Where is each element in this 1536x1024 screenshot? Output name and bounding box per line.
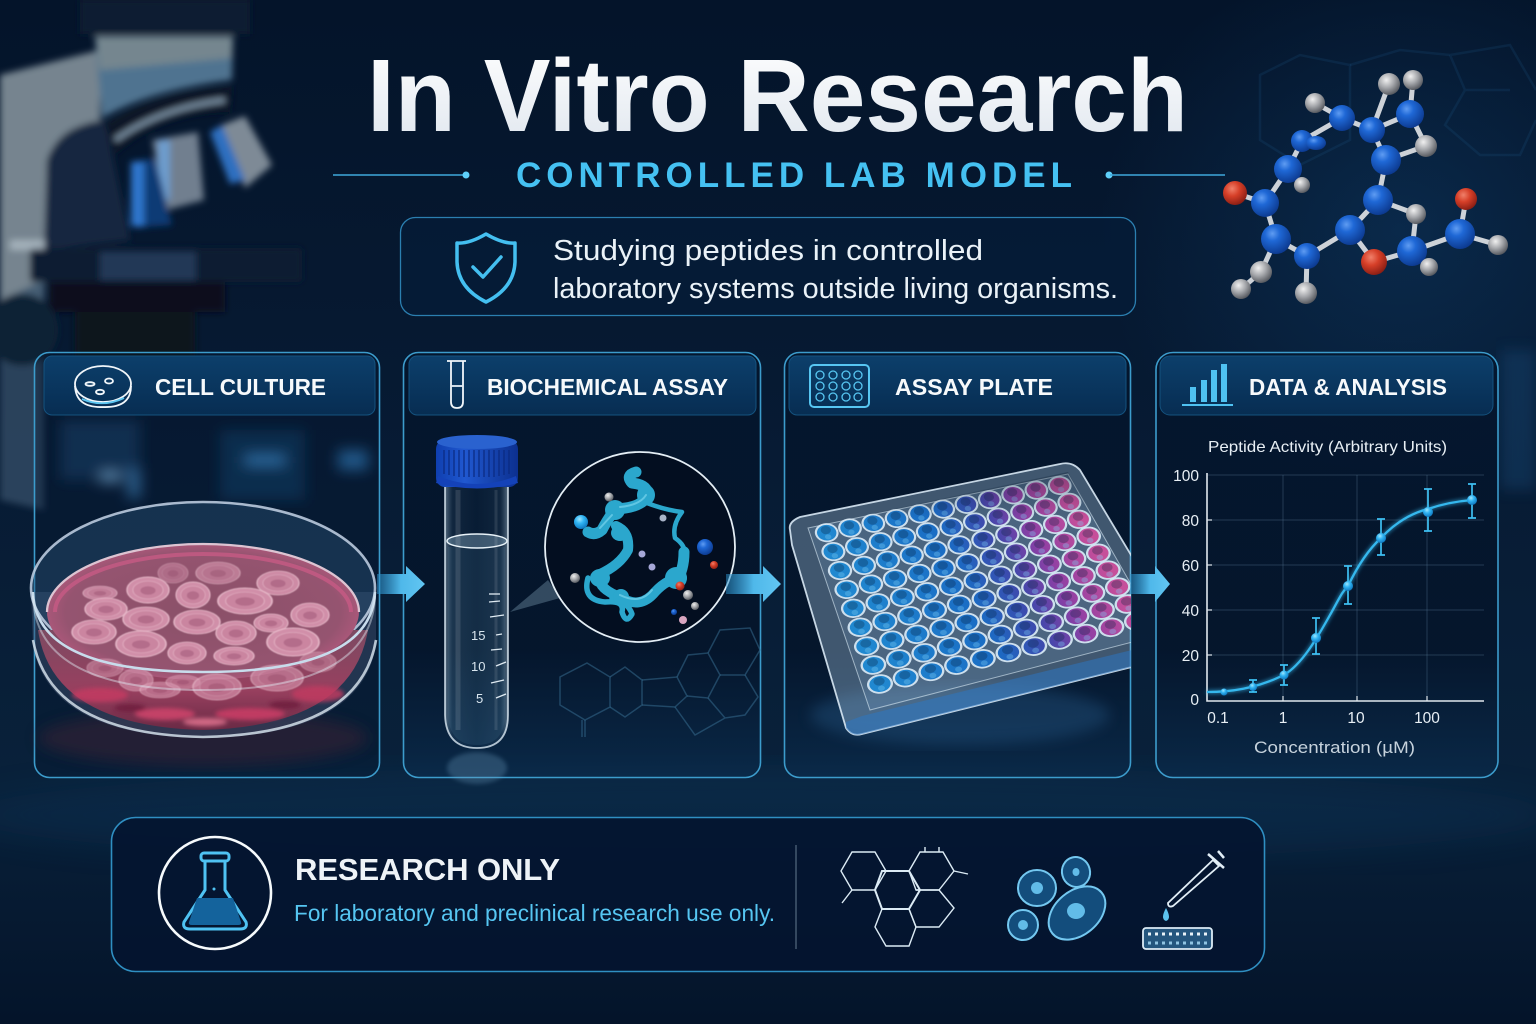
x axis labels: 0.1 bbox=[1207, 710, 1229, 727]
x axis labels: 100 bbox=[1414, 710, 1440, 727]
well plate bbox=[790, 463, 1140, 745]
error bars bbox=[1249, 484, 1476, 692]
peptide magnifier bbox=[545, 452, 735, 642]
y axis labels: 80 bbox=[1182, 513, 1199, 530]
icon: shield bbox=[457, 234, 515, 302]
faint hexagon structure bbox=[560, 628, 760, 737]
x axis title: Concentration (µM) bbox=[1254, 738, 1415, 757]
panel: cell culture bbox=[31, 352, 380, 778]
chart title: Peptide Activity (Arbitrary Units) bbox=[1208, 439, 1447, 456]
x axis labels: 1 bbox=[1279, 710, 1287, 727]
test tube: 15 bbox=[471, 628, 485, 643]
icon: cells bbox=[1008, 854, 1116, 950]
x axis labels: 10 bbox=[1347, 710, 1365, 727]
callout wedge bbox=[510, 580, 560, 612]
heading: DATA & ANALYSIS bbox=[1249, 374, 1447, 400]
petri dish bbox=[31, 502, 376, 766]
y axis labels: 40 bbox=[1182, 603, 1199, 620]
line chart bbox=[1173, 468, 1484, 757]
heading: ASSAY PLATE bbox=[895, 374, 1053, 400]
arrow: culture to assay bbox=[377, 566, 425, 602]
icon: petri dish bbox=[75, 366, 131, 407]
y axis labels: 20 bbox=[1182, 648, 1199, 665]
note: For laboratory and preclinical research use only. bbox=[294, 900, 775, 926]
background hexagon network bbox=[1260, 45, 1536, 165]
icon: well plate bbox=[810, 365, 869, 407]
heading: BIOCHEMICAL ASSAY bbox=[487, 374, 728, 400]
test tube: 5 bbox=[476, 691, 483, 706]
icon: molecular hexagons bbox=[841, 847, 968, 946]
info text: laboratory systems outside living organisms. bbox=[553, 273, 1118, 305]
data points bbox=[1220, 495, 1477, 696]
blurred microscope bbox=[0, 0, 302, 510]
icon: bar chart bbox=[1182, 364, 1233, 406]
arrow: assay to plate bbox=[726, 566, 781, 602]
panel: assay plate bbox=[784, 352, 1140, 778]
panel: data and analysis bbox=[1156, 352, 1498, 778]
y axis labels: 0 bbox=[1190, 692, 1199, 709]
test tube: 10 bbox=[471, 659, 485, 674]
test tube bbox=[436, 435, 518, 784]
arrow: plate to data bbox=[1130, 566, 1170, 602]
y axis labels: 60 bbox=[1182, 558, 1199, 575]
blurred lab bottles bbox=[60, 420, 368, 500]
molecule bbox=[1223, 70, 1508, 304]
icon: flask badge bbox=[159, 837, 271, 949]
y axis labels: 100 bbox=[1173, 468, 1199, 485]
sigmoid curve bbox=[1207, 500, 1472, 692]
subtitle row bbox=[333, 156, 1225, 195]
subtitle: CONTROLLED LAB MODEL bbox=[516, 156, 1072, 195]
title: In Vitro Research bbox=[367, 38, 1188, 153]
panel: research only bbox=[112, 818, 1264, 972]
info box bbox=[400, 218, 1136, 316]
icon: test tube bbox=[447, 361, 466, 408]
heading: CELL CULTURE bbox=[155, 374, 326, 400]
panel: biochemical assay bbox=[404, 352, 760, 784]
info text: Studying peptides in controlled bbox=[553, 235, 983, 267]
heading: RESEARCH ONLY bbox=[295, 852, 560, 887]
icon: pipette and plate bbox=[1143, 851, 1224, 949]
